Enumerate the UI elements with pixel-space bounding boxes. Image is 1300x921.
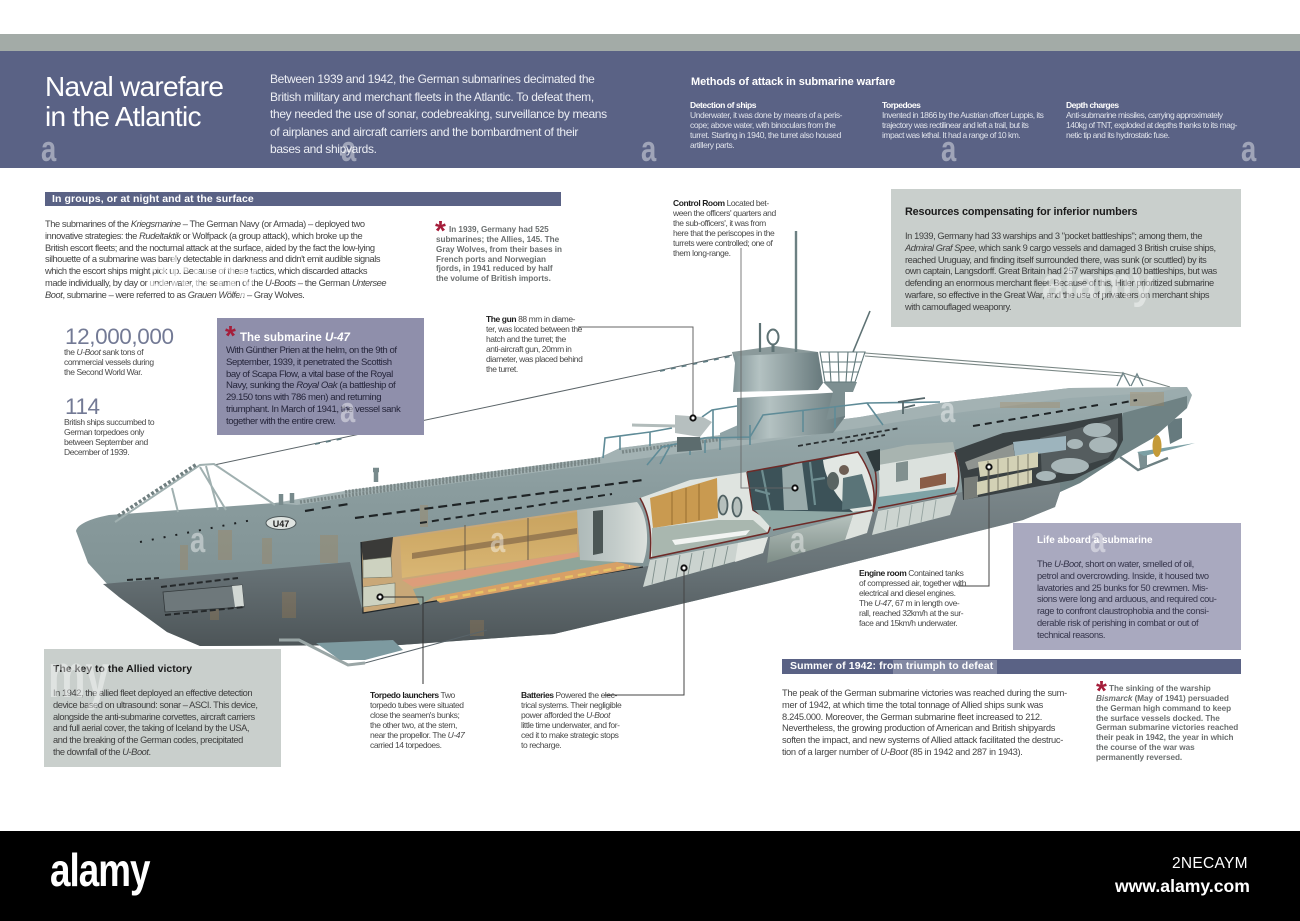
ring [768, 330, 778, 344]
method: torpedoes: impact was lethal. It had a range of 10 km. [882, 130, 1020, 140]
slats [437, 566, 630, 600]
slots [127, 578, 244, 615]
panel: life aboard [1013, 523, 1241, 650]
life text: rage to confront claustrophobia and the consi- [1037, 606, 1209, 616]
key text: alongside the anti-submarine corvettes, aircraft carriers [53, 712, 255, 722]
resources text: with camouflaged weaponry. [905, 302, 1011, 312]
batteries label: to recharge. [521, 740, 561, 750]
body text: groups: which the escort ships might pick up. Because of these tactics, which discarded attacks [45, 266, 367, 276]
body text: groups: innovative strategies: the Rudeltaktik or Wolfpack (a group attack), which broke up the [45, 231, 362, 241]
watermark letters: a [340, 389, 355, 430]
propeller [1152, 435, 1162, 457]
red star: * [225, 320, 236, 351]
life text: technical reasons. [1037, 630, 1105, 640]
note text: German submarine victories reached [1096, 723, 1238, 732]
room base [361, 510, 643, 613]
key text: and full aerial cover, the taking of Iceland by the USA, [53, 723, 249, 733]
floor [755, 510, 873, 530]
bandstand rail [820, 352, 865, 382]
resources text: own captain, Langsdorff. Great Britain had 257 warships and 10 battleships, but was [905, 266, 1217, 276]
grey machinery [965, 444, 1015, 470]
control room label: the sub-officers', it was from [673, 218, 766, 228]
stat: 12,000,000 [64, 324, 174, 377]
U-47 text: 29.150 tons with 786 men) and returning [226, 392, 381, 403]
key text: the downfall of the U-Boot. [53, 747, 151, 757]
breech [675, 415, 712, 437]
watermark letters: a [490, 519, 505, 560]
engine room label: electrical and diesel engines. [859, 588, 956, 598]
cylinder top [870, 442, 955, 465]
resources text: warfare, so effective in the Great War, and the use of privateers on merchant ships [905, 290, 1209, 300]
cutaway: control room [747, 452, 874, 530]
life text [1037, 559, 1216, 640]
panel ribs [885, 500, 936, 530]
torpedo label: Torpedo launchers Two [370, 690, 455, 700]
key text: device based on ultrasound: sonar – ASCI. This device, [53, 700, 258, 710]
control room label: Control Room Located bet- [673, 198, 769, 208]
panel: resources [891, 189, 1241, 327]
note text: the surface vessels docked. The [1096, 714, 1220, 723]
intro text: of airplanes and aircraft carriers and the bombardment of their [270, 125, 578, 139]
tank hatch [866, 449, 880, 472]
batteries label: trical systems. Their negligible [521, 700, 621, 710]
intro text: bases and shipyards. [270, 142, 377, 156]
torpedo label: close the seamen's bunks; [370, 710, 459, 720]
cutaway: engine room [955, 413, 1123, 500]
diagonal mast [853, 311, 870, 352]
U-47 text: Navy, sunking the Royal Oak (a battleship of [226, 380, 395, 391]
lower tank white end [845, 511, 873, 540]
upper floor [402, 552, 578, 587]
method: detection of ships [690, 100, 842, 150]
key text: and the breaking of the German codes, precipitated [53, 735, 243, 745]
section bar: groups: In groups, or at night and at the surface [52, 193, 254, 205]
stat caption: British ships succumbed to [64, 417, 154, 427]
stat caption: the Second World War. [64, 367, 142, 377]
machinery backdrop [1040, 418, 1118, 478]
watermark letters: a [941, 128, 956, 169]
tower cap [732, 346, 818, 356]
slat floor [433, 562, 640, 603]
dive plane recess [127, 578, 244, 615]
resources text: defending an enormous merchant fleet. Because of this, Hitler prioritized submarine [905, 278, 1214, 288]
room [955, 413, 1123, 500]
key heading: The key to the Allied victory [53, 663, 192, 675]
section bar: summer 1942 [782, 659, 1241, 674]
gun label: ter, was located between the [486, 324, 582, 334]
stat caption: December of 1939. [64, 447, 129, 457]
note text: In 1939, Germany had 525 [449, 225, 549, 234]
control room label [673, 198, 776, 258]
gun label: diameter, was placed behind [486, 354, 582, 364]
note text: The sinking of the warship [1109, 684, 1211, 693]
plate [266, 516, 296, 530]
locker seams [672, 484, 699, 525]
watermark letters: a [1090, 519, 1105, 560]
method: depth charges [1066, 100, 1238, 140]
crew figures [842, 474, 872, 510]
markers [377, 415, 992, 600]
control room label: here that the periscopes in the [673, 228, 774, 238]
stern skeg [1120, 457, 1168, 470]
mount [677, 437, 702, 452]
U-47 text: bay of Scapa Flow, a vital base of the Royal [226, 368, 393, 380]
bow net cutter frame [115, 464, 275, 522]
note text [1096, 684, 1238, 762]
U-47 text: triumphant. In March of 1941, the vessel sank [226, 404, 400, 415]
hull dashes tower side [798, 428, 900, 446]
life text: derable risk of perishing in combat or out of [1037, 618, 1198, 628]
note text: the course of the war was [1096, 743, 1195, 752]
mast small [759, 323, 761, 352]
tower upper [732, 352, 823, 392]
hull dashes row one [305, 503, 355, 511]
hull lower dark section [103, 470, 1060, 646]
recess [163, 585, 244, 612]
resources text: reached Uruguay, and finding itself surrounded there, was sunk (or scuttled) by its [905, 254, 1206, 264]
body text: groups: silhouette of a submarine was barely detectable in darkness and didn't emit audible signals [45, 254, 380, 264]
torpedo label: carried 14 torpedoes. [370, 740, 442, 750]
control room label: ween the officers' quarters and [673, 208, 776, 218]
intro text [270, 72, 607, 156]
cutaway: crew compartment [640, 472, 772, 558]
room back [747, 452, 874, 530]
net cutter: stern [1117, 373, 1143, 386]
body text: summer: tion of a larger number of U-Boot (85 in 1942 and 287 in 1943). [782, 747, 1023, 757]
note text: Bismarck (May of 1941) persuaded [1096, 694, 1229, 703]
anti-aircraft gun [898, 398, 925, 414]
body text: summer: mer of 1942, at which time the total tonnage of Allied ships sunk was [782, 700, 1043, 710]
diesel block top [978, 452, 1038, 477]
note text: permanently reversed. [1096, 753, 1182, 762]
intro text: British military and merchant fleets in the Atlantic. To defeat them, [270, 90, 594, 104]
deck railings [603, 402, 940, 465]
method: depth charges: Anti-submarine missiles, carrying approximately [1066, 110, 1222, 120]
body text: summer: Nevertheless, the growing production of American and British shipyards [782, 723, 1055, 733]
wood wall [400, 512, 577, 578]
tower lower [737, 392, 845, 440]
stat caption [64, 347, 154, 377]
body text: summer [782, 688, 1067, 757]
gun label: The gun 88 mm in diame- [486, 314, 575, 324]
life text: lavatories and 25 bunks for 50 crewmen. Mis- [1037, 582, 1208, 592]
title: in the Atlantic [45, 101, 201, 132]
stat number: 12,000,000 [65, 324, 174, 349]
stat caption [64, 417, 154, 457]
note text: their peak in 1942, the year in which [1096, 733, 1233, 742]
image id: 2NECAYM [1172, 855, 1248, 872]
red edge [640, 472, 772, 558]
engine room label: face and 15km/h underwater. [859, 618, 957, 628]
body text: groups: made individually, by day or underwater, the seamen of the U-Boots – the German Untersee [45, 278, 386, 288]
method: detection of ships: turret. Starting in 1940, the turret also housed [690, 130, 841, 140]
body text: summer: soften the impact, and new systems of Allied attack facilitated the destruc- [782, 735, 1063, 745]
engine top [1013, 436, 1066, 457]
U-47 text: With Günther Prien at the helm, on the 9th of [226, 345, 397, 356]
body text: groups [45, 219, 386, 300]
bulkhead door [593, 510, 603, 555]
leader: batteries [605, 568, 684, 695]
method: torpedoes: Invented in 1866 by the Austrian officer Luppis, its [882, 110, 1043, 120]
intro text: Between 1939 and 1942, the German submarines decimated the [270, 72, 595, 86]
control room label: them long-range. [673, 248, 731, 258]
hatch small [839, 465, 849, 475]
method: detection of ships: artillery parts. [690, 140, 734, 150]
method: detection of ships: Detection of ships [690, 100, 756, 110]
method: depth charges: 140kg of TNT, exploded at depths thanks to its mag- [1066, 120, 1237, 130]
title: Naval warefare [45, 71, 223, 102]
ladders [755, 462, 825, 510]
engine room label: rall, reached 32km/h at the sur- [859, 608, 963, 618]
gun label: hatch and the turret; the [486, 334, 566, 344]
U-47 text: together with the entire crew. [226, 416, 335, 426]
wire insulators [315, 356, 732, 444]
U-47 heading: The submarine U-47 [240, 332, 350, 344]
key text: In 1942, the allied fleet deployed an effective detection [53, 688, 252, 698]
bunk [412, 528, 577, 559]
watermark letters: a [341, 128, 356, 169]
batteries label: power afforded the U-Boot [521, 710, 610, 720]
table [920, 473, 946, 489]
hull upper [76, 387, 1192, 646]
side fairing [720, 422, 750, 441]
red edge [870, 452, 959, 512]
resources text: In 1939, Germany had 33 warships and 3 "pocket battleships"; among them, the [905, 231, 1202, 241]
note text [436, 225, 562, 283]
torpedo label: near the propellor. The U-47 [370, 730, 464, 740]
leader: engine [958, 467, 989, 586]
portholes [718, 496, 742, 516]
wire: bow net cutter [214, 355, 732, 465]
lower tank [767, 515, 853, 563]
deck surface [275, 387, 1187, 505]
hull dashes row three [420, 400, 1137, 523]
engine room label: Engine room Contained tanks [859, 568, 963, 578]
label plate U47 [266, 516, 296, 530]
deck grille [300, 438, 730, 502]
method: depth charges: Depth charges [1066, 100, 1119, 110]
life text: The U-Boot, short on water, smelled of oil, [1037, 559, 1194, 569]
dark bottom edge [361, 542, 643, 613]
method: detection of ships: cope; above water, with binoculars from the [690, 120, 835, 130]
body text: summer: The peak of the German submarine victories was reached during the sum- [782, 688, 1067, 698]
method: detection of ships: Underwater, it was done by means of a peris- [690, 110, 842, 120]
diesel block lower [977, 470, 1032, 495]
body text: groups: British escort fleets; and the nocturnal attack at the surface, aided by the fact the low-lying [45, 242, 375, 252]
stat caption: commercial vessels during [64, 357, 154, 367]
watermark letters: a [640, 389, 655, 430]
torpedo tubes [363, 557, 395, 607]
floor [652, 520, 768, 557]
bow serrated edge [118, 464, 197, 516]
note text: Gray Wolves, from their bases in [436, 245, 562, 254]
watermark letters: a [190, 519, 205, 560]
control room label: turrets were controlled; one of [673, 238, 772, 248]
body text: summer: 8.245.000. Moreover, the German submarine fleet increased to 212. [782, 712, 1042, 722]
batteries label: Batteries Powered the elec- [521, 690, 617, 700]
recess highlight [232, 585, 244, 607]
gun label: the turret. [486, 364, 518, 374]
watermark letters: a [641, 128, 656, 169]
torpedo label: the other two, at the stern, [370, 720, 457, 730]
footer bar [0, 831, 1300, 921]
engine room label [859, 568, 966, 628]
hatches [827, 472, 839, 490]
watermark letters: a [790, 519, 805, 560]
cutaway: galley compartment [870, 442, 959, 535]
method: torpedoes: Torpedoes [882, 100, 920, 110]
alamy logo: alamy [50, 844, 150, 896]
red star: * [1096, 675, 1107, 706]
room back [878, 452, 959, 508]
periscope mast [795, 231, 797, 352]
leader: the gun [578, 327, 693, 418]
note text: French ports and Norwegian [436, 255, 546, 264]
watermark letters: alamy [147, 249, 259, 298]
title [45, 71, 223, 132]
resources text: Admiral Graf Spee, which sank 9 cargo vessels and damaged 3 British cruise ships, [905, 243, 1216, 253]
note: Bismarck [1096, 675, 1238, 762]
life heading: Life aboard a submarine [1037, 535, 1153, 546]
batteries label: little time underwater, and for- [521, 720, 620, 730]
method: depth charges: netic tip and its hydrostatic fuse. [1066, 130, 1169, 140]
cutaway: forward torpedo room [361, 510, 643, 613]
panel: key to allied victory [44, 649, 281, 767]
forward fin [279, 640, 403, 665]
bandstand base [823, 382, 857, 420]
keel wire [365, 630, 487, 663]
ring aerial [768, 330, 778, 352]
stat caption: between September and [64, 437, 148, 447]
watermark letters: alamy [1042, 259, 1154, 308]
stat caption: German torpedoes only [64, 427, 144, 437]
battery ribs [652, 546, 728, 584]
watermark letters: my [48, 642, 109, 711]
leader: torpedo [380, 597, 423, 684]
stat: 114 [64, 394, 154, 457]
life text: sions were long and arduous, and required cou- [1037, 594, 1216, 604]
batteries label: ced it to make strategic stops [521, 730, 618, 740]
U-47 text: September, 1939, it penetrated the Scottish [226, 357, 392, 368]
door [896, 461, 908, 482]
skeg strut [1138, 452, 1147, 468]
red star: * [435, 215, 446, 246]
bollards [281, 470, 379, 505]
barrel [632, 425, 676, 426]
block seams [988, 454, 1028, 493]
stern shading [1060, 396, 1187, 492]
stat caption: the U-Boot sank tons of [64, 347, 143, 357]
engine room label: The U-47, 67 m in length ove- [859, 598, 959, 608]
conning tower [720, 346, 865, 441]
bow rivets [140, 520, 252, 542]
bunks white [672, 530, 750, 545]
lower left machinery [964, 476, 978, 500]
deck gun [632, 415, 712, 452]
fin plate [316, 640, 403, 660]
dive plane [1137, 443, 1195, 456]
batteries label [521, 690, 622, 750]
intro text: they needed the use of sonar, codebreaking, surveillance by means [270, 107, 607, 121]
panel: the submarine U-47 [217, 318, 424, 435]
methods heading: Methods of attack in submarine warfare [691, 76, 895, 88]
note text: fjords, in 1941 reduced by half [436, 264, 553, 273]
ring stem [772, 344, 774, 352]
U-47 text [226, 345, 401, 426]
hull [76, 387, 1192, 646]
floor [878, 487, 955, 508]
watermark letters: a [940, 389, 955, 430]
watermark letters: a [1241, 128, 1256, 169]
periscope machinery [782, 462, 808, 510]
red edge [747, 452, 874, 530]
lower panel [872, 495, 957, 535]
resources heading: Resources compensating for inferior numbers [905, 206, 1137, 218]
wire: stern net cutter [865, 353, 1170, 387]
gun label: anti-aircraft gun, 20mm in [486, 344, 571, 354]
rust streaks [180, 392, 1164, 636]
dark corner [361, 537, 393, 562]
white circular wall [823, 452, 874, 512]
note: 1939 numbers [435, 215, 562, 283]
leader: control room [741, 248, 795, 488]
fin strut [279, 640, 365, 665]
method: torpedoes: trajectory was rectilinear and left a trail, but its [882, 120, 1028, 130]
note text: submarines; the Allies, 145. The [436, 235, 559, 244]
torpedo label: torpedo tubes were situated [370, 700, 464, 710]
bulkhead: forward [577, 502, 647, 563]
section bar: groups [45, 192, 561, 206]
section bar: summer 1942: Summer of 1942: from triumph to defeat [790, 660, 993, 672]
website: www.alamy.com [1115, 876, 1250, 896]
motor cylinders [1036, 423, 1117, 481]
torpedo pit [413, 557, 617, 605]
torpedo label [370, 690, 466, 750]
note text: the German high command to keep [1096, 704, 1231, 713]
body text: groups: The submarines of the Kriegsmarine – The German Navy (or Armada) – deployed two [45, 219, 365, 229]
body text: groups: Boot, submarine – were referred to as Grauen Wölfen – Gray Wolves. [45, 290, 304, 300]
wood lockers [650, 478, 718, 528]
resources text [904, 231, 1217, 312]
header panel [0, 51, 1300, 168]
note text: the volume of British imports. [436, 274, 551, 283]
bunk frame [465, 518, 528, 572]
engine room label: of compressed air, together with [859, 578, 966, 588]
room base [640, 472, 772, 558]
hull dashes row two [355, 480, 643, 518]
top grey band [0, 34, 1300, 51]
gun label [486, 314, 582, 374]
rudder [1167, 418, 1182, 444]
plate text: U47 [273, 519, 289, 529]
stat number: 114 [65, 394, 100, 419]
lower compartment: batteries [643, 537, 768, 587]
bright end [735, 537, 768, 562]
key text [53, 688, 258, 757]
life text: petrol and overcrowding. Inside, it housed two [1037, 571, 1209, 581]
method: torpedoes [882, 100, 1044, 140]
rudder and propeller group [1120, 418, 1195, 470]
watermark letters: a [41, 128, 56, 169]
